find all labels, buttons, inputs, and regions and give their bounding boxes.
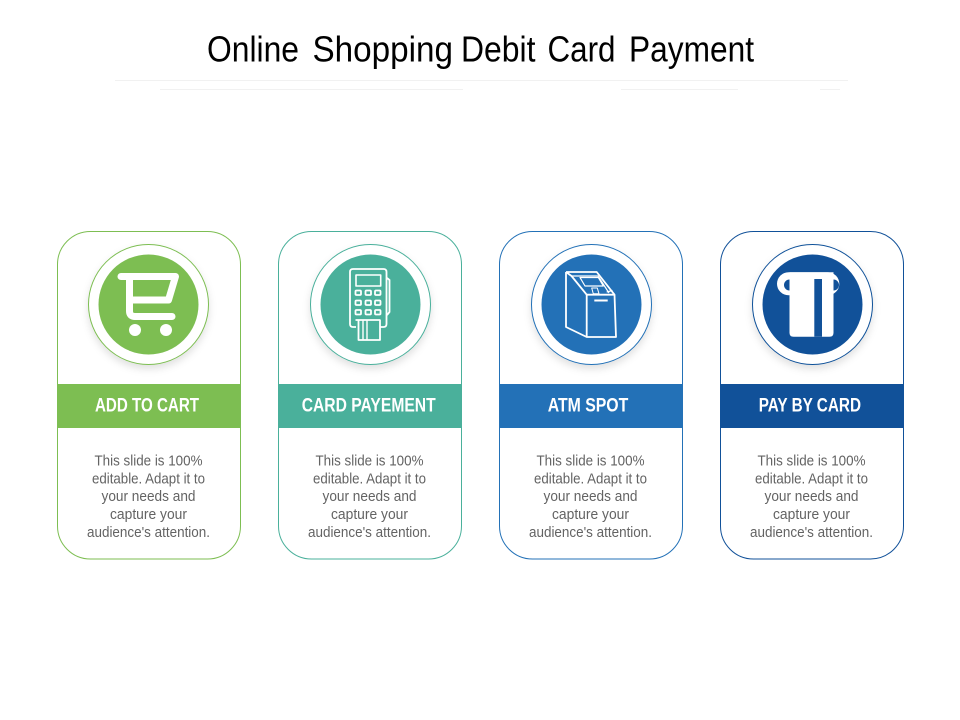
text block: card payement: audience's attention. — [308, 524, 431, 541]
text block: add to cart: This slide is 100% — [94, 452, 202, 470]
text block: atm spot: audience's attention. — [529, 524, 652, 541]
text block: pay by card — [750, 452, 873, 541]
title: Debit — [461, 28, 536, 70]
text block: card payement — [308, 452, 431, 541]
heading band: add to cart: ADD TO CART — [95, 394, 199, 416]
icon: shopping cart — [88, 244, 208, 364]
text block: add to cart — [87, 452, 210, 541]
panel: atm spot — [500, 232, 682, 559]
icon: atm machine — [532, 244, 652, 364]
text block: pay by card: capture your — [773, 506, 850, 523]
heading band: add to cart — [58, 384, 240, 428]
text block: add to cart: editable. Adapt it to — [92, 470, 205, 488]
text block: pay by card: This slide is 100% — [758, 452, 866, 470]
text block: pay by card: your needs and — [764, 488, 858, 505]
title: Card — [548, 28, 616, 70]
title: Online — [207, 28, 299, 70]
text block: card payement: your needs and — [322, 488, 416, 505]
text block: add to cart: capture your — [110, 506, 187, 523]
heading band: pay by card: PAY BY CARD — [759, 394, 861, 416]
panel: add to cart — [58, 232, 240, 559]
text block: card payement: This slide is 100% — [316, 452, 424, 470]
text block: atm spot: editable. Adapt it to — [534, 470, 647, 488]
heading band: atm spot — [500, 384, 682, 428]
text block: atm spot: your needs and — [544, 488, 638, 505]
title: Payment — [629, 28, 754, 70]
heading band: card payement — [278, 384, 462, 428]
text block: card payement: capture your — [331, 506, 408, 523]
panel: card payement — [278, 232, 462, 559]
title — [207, 28, 754, 70]
text block: pay by card: editable. Adapt it to — [755, 470, 868, 488]
text block: card payement: editable. Adapt it to — [313, 470, 426, 488]
text block: add to cart: your needs and — [102, 488, 196, 505]
text block: add to cart: audience's attention. — [87, 524, 210, 541]
icon: card in slot — [752, 244, 872, 364]
text block: atm spot: capture your — [552, 506, 629, 523]
panel: pay by card — [720, 232, 904, 559]
text block: pay by card: audience's attention. — [750, 524, 873, 541]
heading band: card payement: CARD PAYEMENT — [302, 394, 436, 416]
heading band: atm spot: ATM SPOT — [548, 394, 628, 416]
text block: atm spot — [529, 452, 652, 541]
text block: atm spot: This slide is 100% — [536, 452, 644, 470]
heading band: pay by card — [720, 384, 904, 428]
title: Shopping — [312, 28, 453, 70]
icon: card terminal — [310, 244, 430, 364]
